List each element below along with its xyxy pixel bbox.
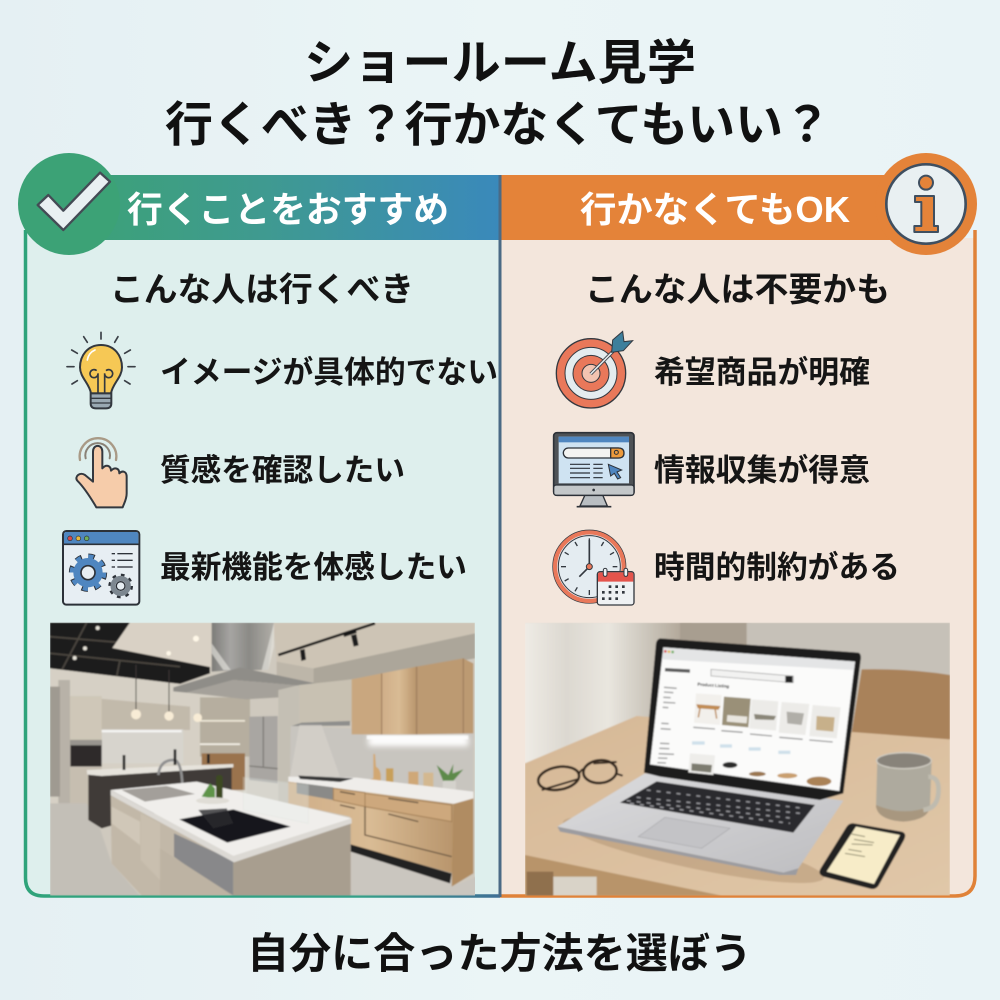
icon: check mark — [38, 173, 110, 230]
header: recommended: 行くことをおすすめ — [127, 189, 449, 230]
icon: target with arrow — [556, 331, 633, 408]
icon: clock and calendar — [553, 530, 634, 605]
icon: light bulb — [67, 332, 135, 408]
item: good at gathering information: 情報収集が得意 — [654, 453, 870, 488]
icon: pointing hand — [76, 438, 127, 507]
subheading: who should go: こんな人は行くべき — [110, 272, 414, 309]
item: clear product wishes: 希望商品が明確 — [654, 355, 870, 390]
item: good at gathering information — [554, 433, 870, 507]
footer message: 自分に合った方法を選ぼう — [247, 930, 752, 977]
item: image not concrete — [67, 332, 498, 408]
panel: go to the showroom — [18, 153, 500, 897]
header: recommended — [18, 153, 500, 255]
item: check texture: 質感を確認したい — [160, 453, 405, 488]
title — [165, 37, 831, 152]
title: ショールーム見学 — [304, 37, 696, 90]
title: 行くべき？行かなくてもいい？ — [165, 99, 831, 152]
item: time constraints: 時間的制約がある — [654, 550, 900, 585]
header: OK not to go — [500, 153, 977, 255]
photo: laptop on table: Product Listing — [697, 682, 730, 689]
panel: no need to go — [500, 153, 977, 897]
item: image not concrete: イメージが具体的でない — [160, 355, 498, 390]
center divider — [498, 175, 502, 897]
icon: information — [886, 164, 966, 244]
item: time constraints — [553, 530, 900, 605]
icon: settings window — [63, 531, 139, 605]
photo: showroom kitchen — [50, 623, 477, 896]
photo: laptop on table — [525, 623, 950, 896]
item: experience latest features — [63, 531, 467, 605]
header: OK not to go: 行かなくてもOK — [580, 189, 850, 230]
subheading: who may not need to go: こんな人は不要かも — [585, 272, 890, 309]
item: check texture — [76, 438, 405, 507]
item: clear product wishes — [556, 331, 870, 408]
icon: monitor with search — [554, 433, 634, 507]
item: experience latest features: 最新機能を体感したい — [160, 550, 467, 585]
